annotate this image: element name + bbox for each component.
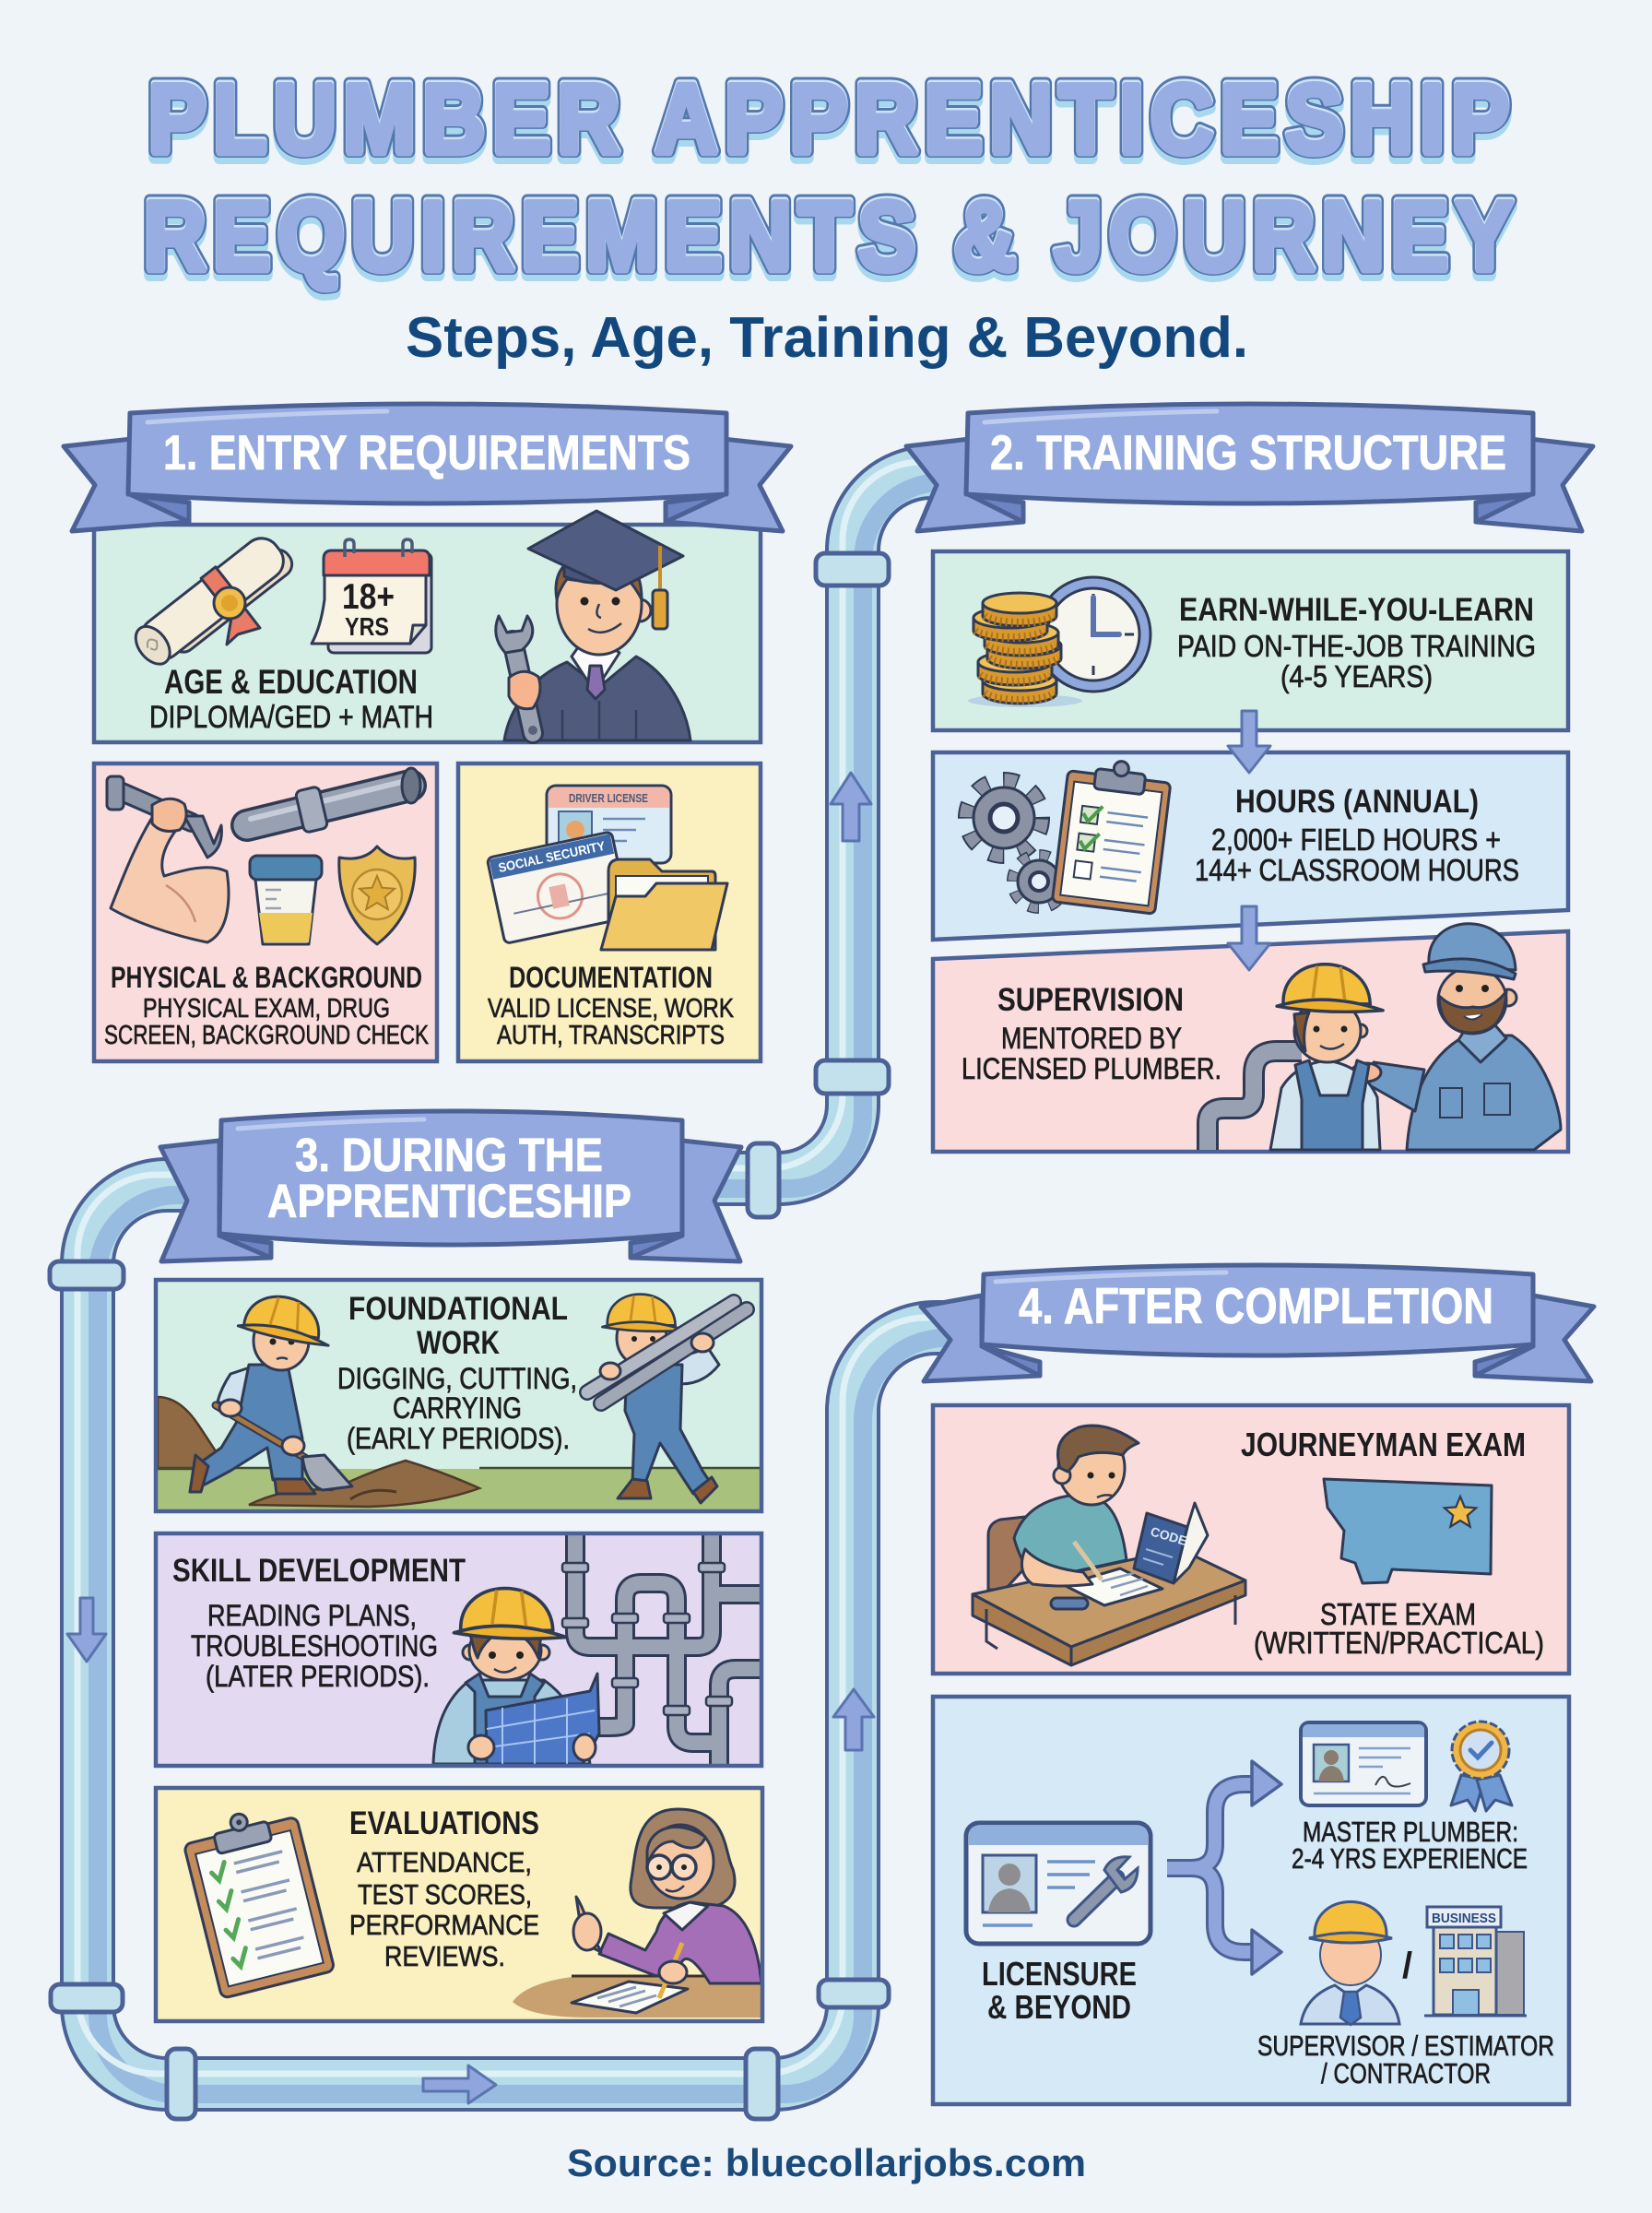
icon: clipboard checklist [1052, 755, 1173, 914]
body text: MENTORED BY [1001, 1022, 1182, 1055]
divider slash: / [1402, 1946, 1412, 1986]
panel: supervision [933, 924, 1568, 1152]
icon: clock and coins [968, 577, 1150, 707]
panel: licensure and beyond [933, 1697, 1569, 2104]
illustration: pipe network [562, 1535, 760, 1764]
banner: 2. training structure [906, 404, 1593, 531]
body text: master plumber [1292, 1816, 1528, 1875]
body text: PAID ON-THE-JOB TRAINING [1177, 629, 1536, 663]
body text: career options: / CONTRACTOR [1321, 2057, 1491, 2089]
icon: social security card: SOCIAL SECURITY [497, 838, 607, 875]
heading: EARN-WHILE-YOU-LEARN [1179, 592, 1534, 628]
banner: 1. entry requirements [64, 404, 791, 531]
body text [349, 1846, 539, 1972]
banner title: 1. ENTRY REQUIREMENTS [163, 426, 690, 480]
body text: master plumber: 2-4 YRS EXPERIENCE [1292, 1842, 1528, 1875]
icon: certified rosette [1451, 1722, 1512, 1811]
illustration: worker digging [190, 1290, 352, 1494]
arrow: career fork [1167, 1761, 1281, 1974]
body text: career options [1257, 2030, 1554, 2089]
heading: JOURNEYMAN EXAM [1241, 1426, 1526, 1463]
body text: master plumber: MASTER PLUMBER: [1303, 1816, 1518, 1848]
banner title [267, 1129, 631, 1227]
heading: SUPERVISION [997, 982, 1184, 1018]
body text: career options: SUPERVISOR / ESTIMATOR [1257, 2030, 1554, 2062]
body text: READING PLANS, [207, 1599, 417, 1632]
body text [104, 994, 430, 1050]
illustration: worker carrying pipes [587, 1295, 747, 1503]
heading: LICENSURE [982, 1955, 1137, 1993]
banner: 3. during the apprenticeship [160, 1111, 741, 1261]
arrow: right on bottom pipe [423, 2065, 496, 2103]
illustration: grass and dirt [158, 1397, 761, 1509]
heading: DOCUMENTATION [509, 961, 713, 994]
icon: clipboard with checks [180, 1801, 335, 1998]
body text [962, 1022, 1221, 1085]
icon: business building [1424, 1907, 1527, 2016]
illustration: student at desk [973, 1426, 1245, 1665]
heading: EVALUATIONS [349, 1805, 539, 1841]
banner: 4. after completion [921, 1265, 1594, 1381]
body text: DIGGING, CUTTING, [337, 1362, 577, 1395]
illustration: student at desk: CODE [1149, 1524, 1188, 1548]
body text: (LATER PERIODS). [206, 1660, 430, 1693]
banner title: 4. AFTER COMPLETION [1019, 1277, 1493, 1334]
panel: skill development [156, 1533, 761, 1766]
illustration: apprentice reading blueprint [433, 1589, 599, 1764]
banner title: APPRENTICESHIP [267, 1175, 631, 1227]
body text: (WRITTEN/PRACTICAL) [1254, 1626, 1544, 1660]
body text: 2,000+ FIELD HOURS + [1211, 822, 1501, 857]
pipe: from training structure down to during the apprenticeship [672, 462, 987, 1217]
arrow: hours to supervision [1228, 906, 1270, 970]
heading: AGE & EDUCATION [164, 663, 418, 701]
icon: Montana state map with star [1324, 1479, 1492, 1583]
icon: diploma scroll [128, 527, 297, 675]
arrow: up on lower right pipe [833, 1689, 874, 1750]
title [144, 62, 1520, 296]
illustration: mentor plumber [1351, 924, 1561, 1150]
heading: PHYSICAL & BACKGROUND [111, 961, 422, 994]
heading: HOURS (ANNUAL) [1235, 784, 1479, 820]
subtitle: Steps, Age, Training & Beyond. [406, 306, 1248, 370]
panel: journeyman exam [933, 1405, 1569, 1674]
heading: FOUNDATIONAL [348, 1291, 568, 1327]
illustration: graduate with wrench [496, 511, 690, 740]
arrow: down on left pipe [67, 1598, 106, 1662]
body text [337, 1362, 577, 1455]
body text: VALID LICENSE, WORK [488, 994, 735, 1024]
body text: STATE EXAM [1320, 1597, 1476, 1631]
icon: specimen cup [250, 856, 322, 944]
body text [1254, 1597, 1544, 1660]
panel: age and education [94, 511, 761, 742]
icon: pipe [247, 768, 420, 833]
body text: PERFORMANCE [349, 1909, 539, 1941]
body text [1177, 629, 1536, 693]
illustration: desk and paper [513, 1976, 761, 2018]
panel: hours annual [933, 752, 1568, 940]
illustration: evaluator with glasses [573, 1809, 761, 1998]
icon: social security card [487, 832, 630, 943]
icon: calendar 18+ years [312, 539, 431, 653]
icon: background check badge [339, 846, 415, 944]
arrow: up on upper pipe [831, 773, 871, 841]
heading [348, 1291, 568, 1361]
illustration: apprentice in hard hat [1270, 964, 1383, 1150]
body text: CARRYING [393, 1391, 522, 1425]
panel: physical and background [94, 763, 437, 1061]
body text [191, 1599, 438, 1693]
icon: driver license: DRIVER LICENSE [569, 791, 648, 805]
banner title: 2. TRAINING STRUCTURE [990, 426, 1506, 480]
icon: flexed arm with wrench [107, 776, 229, 942]
body text [488, 994, 735, 1050]
calendar number: 18+ [342, 577, 395, 617]
banner title: 3. DURING THE [295, 1129, 603, 1181]
body text: REVIEWS. [384, 1940, 505, 1972]
body text: (EARLY PERIODS). [347, 1422, 570, 1455]
icon: gears [966, 780, 1065, 907]
icon: driver license [547, 786, 671, 863]
body text: AUTH, TRANSCRIPTS [497, 1021, 725, 1050]
heading: & BEYOND [987, 1988, 1131, 2026]
icon: folder [601, 859, 727, 950]
illustration: pipe behind apprentice [1208, 1051, 1302, 1150]
body text: TEST SCORES, [358, 1878, 532, 1911]
body text: LICENSED PLUMBER. [962, 1052, 1221, 1085]
source line: Source: bluecollarjobs.com [567, 2141, 1086, 2184]
panel: documentation [458, 763, 761, 1061]
icon: supervisor [1301, 1901, 1399, 2025]
icon: business building: BUSINESS [1432, 1911, 1496, 1926]
heading: WORK [417, 1325, 500, 1361]
body text: TROUBLESHOOTING [191, 1629, 438, 1663]
heading [982, 1955, 1137, 2026]
heading: SKILL DEVELOPMENT [172, 1553, 466, 1589]
pipe: from during the apprenticeship around to after completion [50, 1175, 997, 2119]
panel: evaluations [156, 1788, 762, 2021]
calendar unit: YRS [345, 612, 389, 641]
icon: master plumber card [1301, 1722, 1426, 1805]
panel: foundational work [156, 1280, 761, 1511]
body text: PHYSICAL EXAM, DRUG [143, 994, 390, 1024]
panel: earn while you learn [933, 551, 1568, 730]
arrow: earn to hours [1228, 711, 1270, 773]
body text [1195, 822, 1519, 887]
body text: DIPLOMA/GED + MATH [149, 700, 433, 735]
body text: ATTENDANCE, [357, 1846, 532, 1878]
body text: 144+ CLASSROOM HOURS [1195, 853, 1519, 887]
body text: SCREEN, BACKGROUND CHECK [104, 1021, 430, 1050]
icon: licence card with wrench [966, 1823, 1150, 1944]
body text: (4-5 YEARS) [1280, 659, 1433, 693]
